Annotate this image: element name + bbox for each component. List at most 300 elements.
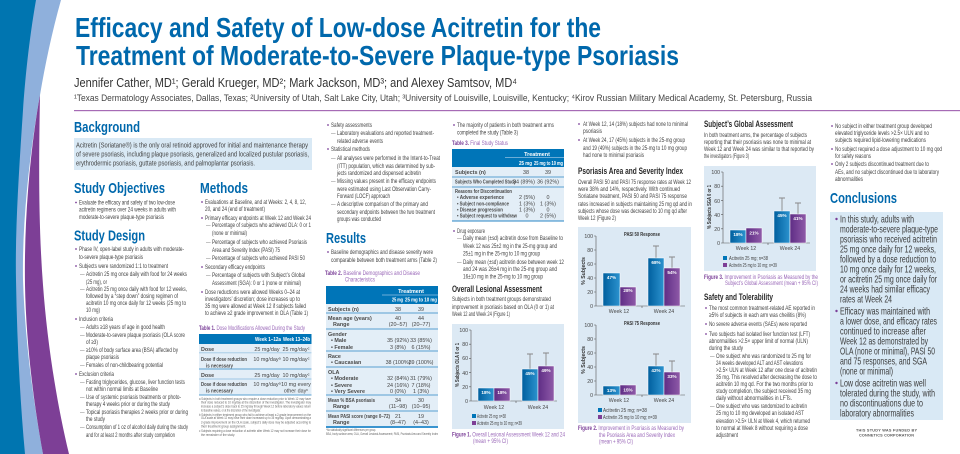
heading: conclusions: Conclusions bbox=[830, 190, 897, 207]
PASI 75 chart: PASI 75 Response bbox=[624, 321, 660, 327]
table 3: 25 mg to 10 mg bbox=[534, 161, 563, 167]
title: Efficacy and Safety of Low-dose Acitretin for the bbox=[75, 12, 601, 43]
figure 3 caption: Figure 3. Improvement in Psoriasis as Measured by the bbox=[704, 274, 818, 281]
text: safety and statistics: A descriptive comparison of the primary and bbox=[337, 201, 428, 208]
table 1 footnotes bbox=[199, 397, 312, 437]
text: study design: Inclusion criteria bbox=[79, 316, 113, 323]
figure 1 caption: (mean + 95% CI) bbox=[473, 438, 508, 445]
text: safety and tolerability: — bbox=[710, 354, 715, 359]
table 1: other dayᶜ bbox=[284, 388, 308, 394]
figure 3 caption: Subject’s Global Assessment (mean + 95% CI) bbox=[725, 280, 818, 287]
text: study completion bbox=[453, 122, 554, 136]
figure 1 chart: 60 bbox=[462, 356, 468, 362]
text: safety and statistics bbox=[327, 122, 440, 223]
text: study design: (25 mg), or bbox=[86, 279, 108, 286]
figure 3 chart: 0 bbox=[717, 241, 720, 247]
PASI 75 chart: 0 bbox=[590, 393, 593, 399]
figure 3 chart: % Subjects SGA 0 or 1 bbox=[707, 185, 713, 229]
text: study design: Exclusion criteria bbox=[79, 371, 114, 378]
table 2: Range bbox=[333, 404, 349, 410]
table 3: 36 (92%) bbox=[537, 180, 559, 186]
text: methods: Percentage of subjects who achieved PASI 50 bbox=[212, 255, 305, 262]
figure 3 chart: 40 bbox=[714, 213, 720, 219]
text: week results: psoriasis bbox=[583, 128, 603, 135]
text: study design: — bbox=[80, 333, 85, 338]
figure 1 chart: Acitretin 25 mg; n=38 bbox=[477, 414, 506, 420]
text: safety and statistics: groups was conducted bbox=[337, 216, 381, 223]
table 2: Treatment bbox=[398, 289, 424, 295]
table 1: is necessary bbox=[206, 388, 233, 394]
heading: results: Results bbox=[326, 230, 366, 247]
table 2: • Caucasian bbox=[331, 360, 361, 366]
text: drug exposure: and 24 was 26±4 mg in the 25-mg group and bbox=[463, 266, 557, 273]
text: study design: and for at least 2 months after study completion bbox=[86, 432, 175, 439]
text: safety and tolerability: during the study bbox=[709, 345, 744, 352]
text: safety and statistics: — bbox=[331, 131, 336, 136]
text: methods: Area and Severity Index (PASI) 75 bbox=[212, 247, 280, 254]
table 2: (4–43) bbox=[413, 420, 429, 426]
PASI 75 chart: 100 bbox=[584, 323, 593, 329]
text: methods: 20, and 24 (end of treatment) bbox=[205, 206, 265, 213]
text: week results bbox=[578, 121, 688, 159]
table 1: Week 13–24b bbox=[283, 337, 311, 343]
text: week results: had none to minimal psoriasis bbox=[583, 152, 644, 159]
text: safety and tolerability: elevation >2.5× ULN at Week 4, which returned bbox=[716, 418, 810, 425]
table 1: 10 mg/dayᶜ bbox=[282, 373, 310, 379]
title: Treatment of Moderate-to-Severe Plaque-type Psoriasis bbox=[76, 40, 679, 71]
table 2: 7 (18%) bbox=[412, 383, 431, 389]
text: PASI: rates increased in subjects maintaining 25 mg qd and in bbox=[578, 201, 692, 208]
table 2: 40 bbox=[395, 316, 401, 322]
text: drug exposure: Daily mean (±sd) acitretin dose between week 12 bbox=[463, 259, 564, 266]
table 3: 0 bbox=[546, 208, 550, 214]
figure 2 caption: Figure 2. Improvement in Psoriasis as Measured by bbox=[578, 425, 685, 432]
text: safety and tolerability: ≥5% of subjects in each arm was cheilitis (8%) bbox=[709, 312, 806, 319]
text: laboratory findings: abnormalities bbox=[835, 176, 863, 183]
table 2: OLA bbox=[328, 370, 339, 376]
text: subject's global assessment bbox=[704, 132, 814, 160]
figure 1 chart bbox=[452, 324, 564, 429]
text: methods: Assessment (SGA): 0 or 1 (none or minimal) bbox=[212, 280, 301, 287]
table 1 footnotes: to Baseline values, or at the discretion of the investigator. bbox=[201, 408, 261, 412]
table 3: • Subject non-compliance bbox=[457, 202, 509, 208]
text: study objectives: moderate-to-severe plaque-type psoriasis bbox=[79, 214, 164, 221]
figure 1 chart: Week 12 bbox=[484, 405, 504, 411]
table 1 footnotes: the remainder of the study. bbox=[201, 433, 235, 437]
PASI 50 chart: 20 bbox=[587, 290, 593, 296]
figure 3 chart: 21% bbox=[749, 230, 759, 236]
text: study design: therapy 4 weeks prior or during the study bbox=[86, 401, 170, 408]
text: overall lesional assessment: Week 12 and Week 24 (Figure 1) bbox=[452, 311, 510, 318]
text: study design: — bbox=[80, 395, 85, 400]
figure 3 chart: 41% bbox=[793, 216, 803, 221]
figure 3 chart: Acitretin 25 mg; n=38 bbox=[729, 256, 768, 262]
table 2: 38 (100%) bbox=[386, 360, 411, 366]
PASI 50 chart: % Subjects bbox=[581, 257, 587, 285]
PASI 75 chart: 42% bbox=[651, 368, 661, 373]
table 2 title: Table 2. Baseline Demographics and Disease bbox=[325, 270, 420, 277]
table 3: 1 (3%) bbox=[519, 208, 535, 214]
figure 1 chart: Acitretin 25 mg to 10 mg; n=39 bbox=[477, 421, 522, 427]
table 2: Mean age (years) bbox=[328, 316, 372, 322]
table 2 bbox=[325, 270, 438, 436]
table 1 title: Table 1. Dose Modifications Allowed During the Study bbox=[199, 325, 306, 332]
text: safety and tolerability: acitretin 10 mg qd. For the two months prior to bbox=[716, 381, 813, 388]
PASI 75 chart: 60 bbox=[587, 351, 593, 357]
table 3: 1 (3%) bbox=[519, 202, 535, 208]
table 1 footnotes: their dose reduced to 10 mg/day at the discretion of the investigator. The investigator may bbox=[201, 401, 311, 405]
table 1 footnotes: b Subjects in either treatment group who fail to achieve at least a 2-grade improvement on the bbox=[199, 413, 311, 417]
table 2: 38 bbox=[395, 307, 401, 313]
text: study design: Topical psoriasis therapies 2 weeks prior or during bbox=[86, 409, 188, 416]
table 3 bbox=[452, 140, 564, 221]
decorative swoosh bbox=[0, 0, 69, 454]
heading: PASI: Psoriasis Area and Severity Index bbox=[578, 166, 683, 177]
text: study design: — bbox=[80, 380, 85, 385]
table 2: 19 bbox=[418, 414, 424, 420]
funding note: THIS STUDY WAS FUNDED BY bbox=[856, 428, 917, 432]
table 3: 2 (5%) bbox=[519, 195, 535, 201]
table 2: *No statistically significant differences per group. bbox=[326, 428, 376, 432]
heading: methods: Methods bbox=[200, 180, 248, 197]
PASI 75 chart: Week 12 bbox=[609, 398, 629, 404]
heading: safety and tolerability: Safety and Tolerability bbox=[704, 292, 773, 303]
table 2: • Male bbox=[331, 338, 346, 344]
text: overall lesional assessment: Subjects in both treatment groups demonstrated bbox=[452, 296, 551, 303]
PASI 75 chart: 15% bbox=[623, 388, 633, 392]
table 2: 25 mg to 10 mg bbox=[405, 298, 437, 304]
text: study objectives: acitretin regimens over 24 weeks in adults with bbox=[79, 207, 176, 214]
text: safety and tolerability: 25 mg to 10 mg developed an isolated AST bbox=[716, 410, 804, 417]
PASI 75 chart: 33% bbox=[667, 374, 677, 379]
table 3: Reasons for Discontinuation bbox=[455, 189, 512, 195]
text: safety and tolerability: to normal at Week 8 without requiring a dose bbox=[716, 425, 808, 432]
table 2: Range bbox=[333, 420, 349, 426]
text: drug exposure: Daily mean (±sd) acitretin dose from Baseline to bbox=[463, 235, 563, 242]
heading: study design: Study Design bbox=[74, 228, 145, 244]
text: study completion: The majority of patients in both treatment arms bbox=[457, 122, 554, 129]
table 2: 25 mg bbox=[392, 298, 403, 304]
PASI 50 chart: 100 bbox=[584, 234, 593, 240]
text: safety and tolerability: — bbox=[710, 404, 715, 409]
table 3: 0 bbox=[526, 214, 528, 220]
figure 1 chart: Week 24 bbox=[528, 405, 548, 411]
table 2: 21 bbox=[395, 414, 401, 420]
text: PASI: Overall PASI 50 and PASI 75 response rates at Week 12 bbox=[578, 179, 691, 186]
funding note bbox=[856, 428, 917, 438]
text: study design: Subjects were randomized 1:1 to treatment bbox=[79, 263, 168, 270]
text: study design: ≥10% of body surface area (BSA) affected by bbox=[86, 347, 178, 354]
PASI 75 chart bbox=[581, 321, 685, 404]
text: safety and statistics: jects randomized and dispensed acitretin bbox=[336, 170, 421, 177]
text: safety and statistics: Safety assessments bbox=[331, 122, 372, 129]
PASI 75 chart: % Subjects bbox=[581, 346, 587, 374]
authors: Jennifer Cather, MD¹; Gerald Krueger, MD²; Mark Jackson, MD³; and Alexey Samtsov, MD⁴ bbox=[74, 75, 517, 90]
table 1: 10 mg/dayᵃ bbox=[253, 357, 282, 363]
table 2: BSA, body surface area; OLA, Overall Lesional Assessment; PASI, Psoriasis Area and Severity Index bbox=[326, 432, 438, 436]
text: methods: Percentage of subjects with Subject’s Global bbox=[212, 272, 305, 279]
text: methods: investigators’ discretion; dose increases up to bbox=[205, 296, 300, 303]
table 2: 3 (8%) bbox=[390, 345, 406, 351]
table 2: 44 bbox=[418, 316, 424, 322]
text: drug exposure: Drug exposure bbox=[457, 228, 485, 235]
heading: overall lesional assessment: Overall Lesional Assessment bbox=[452, 284, 543, 295]
table 2: Mean % BSA psoriasis bbox=[328, 398, 375, 404]
table 2: (20–77) bbox=[412, 322, 430, 328]
text: safety and statistics: related adverse events bbox=[337, 138, 383, 145]
text: safety and tolerability: adjustment bbox=[716, 432, 738, 439]
table 2: • Moderate bbox=[331, 376, 358, 382]
text: methods: Primary efficacy endpoints at Week 12 and Week 24 bbox=[205, 215, 311, 222]
PASI 75 chart: 40 bbox=[587, 365, 593, 371]
text: study design: followed by a “step down” dosing regimen of bbox=[86, 293, 178, 300]
table 2: 1 (3%) bbox=[413, 389, 429, 395]
table 3: • Subject request to withdraw bbox=[457, 214, 518, 220]
table 1 bbox=[199, 325, 312, 395]
text: study design: 10 mg) bbox=[86, 307, 100, 314]
table 2: • Female bbox=[331, 345, 353, 351]
text: subject's global assessment: reporting that their psoriasis was none to minimal at bbox=[704, 139, 811, 146]
table 1: Dose if dose reduction bbox=[201, 382, 247, 388]
text: laboratory findings: for safety reasons bbox=[835, 153, 871, 160]
title bbox=[75, 12, 679, 71]
table 1: 10 mg every bbox=[281, 382, 311, 388]
figure 2 chart: Acitretin 25 mg; n=38 bbox=[603, 408, 647, 414]
text: subject's global assessment: Week 12 and Week 24 was similar to that reported by bbox=[704, 146, 814, 153]
figure 1 chart: 40 bbox=[462, 371, 468, 377]
table 2: 30 bbox=[418, 398, 424, 404]
table 2: (10–95) bbox=[412, 404, 430, 410]
figure 2 caption: the Psoriasis Area and Severity Index bbox=[599, 432, 676, 439]
text: safety and tolerability: study completion, the subject received 35 mg bbox=[716, 388, 811, 395]
PASI 75 chart: 13% bbox=[607, 388, 616, 393]
text: safety and tolerability: One subject who was randomized to 25 mg for bbox=[716, 353, 812, 360]
text: overall lesional assessment: improvement in psoriasis based on OLA (0 or 1) at bbox=[452, 304, 554, 311]
panel: background bbox=[74, 138, 312, 170]
text: methods bbox=[201, 199, 311, 317]
text: methods: (none or minimal) bbox=[212, 230, 247, 237]
text: drug exposure: Week 12 was 25±2 mg in the 25-mg group and bbox=[463, 243, 557, 250]
text: study design: — bbox=[80, 325, 85, 330]
text: study design: Moderate-to-severe plaque psoriasis (OLA score bbox=[86, 332, 185, 339]
table 3: Treatment bbox=[524, 152, 550, 158]
text: study design: plaque psoriasis bbox=[86, 354, 119, 361]
PASI 50 chart: Week 24 bbox=[654, 309, 674, 315]
text: safety and tolerability: The most common treatment-related AE reported in bbox=[709, 305, 815, 312]
text: PASI bbox=[577, 179, 692, 222]
heading: subject's global assessment: Subject’s Global Assessment bbox=[704, 119, 794, 130]
table 1: 25 mg/day bbox=[254, 373, 280, 379]
figure 3 chart: Week 24 bbox=[780, 246, 800, 252]
text: safety and statistics: Missing values present in the efficacy endpoints bbox=[337, 178, 436, 185]
text: methods: — bbox=[206, 256, 211, 261]
text: safety and tolerability: daily without abnormalities in LFTs. bbox=[716, 395, 792, 402]
table 2: 39 (100%) bbox=[409, 360, 434, 366]
figure 3 chart: 20 bbox=[714, 227, 720, 233]
figure 1 chart: 18% bbox=[481, 390, 491, 395]
table 1 footnotes: OLA scale at Week 12 may have their dose increased up to 35 mg/day. Upon demonstrating a bbox=[201, 416, 311, 420]
table 2: Mean PASI score (range 0–72) bbox=[328, 414, 390, 420]
text: study design: not within normal limits at Baseline bbox=[86, 386, 158, 393]
PASI 50 chart: Week 12 bbox=[609, 309, 629, 315]
figure 2 caption: (mean + 95% CI) bbox=[599, 438, 633, 446]
PASI 50 chart: 54% bbox=[667, 270, 677, 275]
PASI 50 chart bbox=[581, 232, 685, 315]
table 2: Subjects (n) bbox=[328, 307, 359, 313]
PASI 50 chart: 47% bbox=[607, 275, 616, 280]
text: safety and tolerability: 35 mg. This resolved after decreasing the dose to bbox=[716, 374, 817, 381]
text: methods: Dose reductions were allowed Weeks 0–24 at bbox=[205, 289, 300, 296]
figure 3 chart: Week 12 bbox=[736, 246, 756, 252]
text: methods: Secondary efficacy endpoints bbox=[205, 264, 265, 271]
table 1: Dose if dose reduction bbox=[201, 357, 247, 363]
text: safety and statistics: were estimated using Last Observation Carry- bbox=[336, 186, 431, 193]
text: methods: Percentage of subjects who achieved OLA: 0 or 1 bbox=[212, 222, 311, 229]
table 1 footnotes: their treatment group assignment. bbox=[201, 425, 246, 429]
text: PASI: Week 12 (Figure 2) bbox=[578, 215, 616, 222]
text: safety and tolerability: Two subjects had isolated liver function test (LFT) bbox=[709, 331, 810, 338]
text: safety and statistics: Laboratory evaluations and reported treatment- bbox=[337, 130, 434, 137]
text: study design: Adults ≥18 years of age in good health bbox=[86, 324, 165, 331]
text: study objectives: Evaluate the efficacy and safety of two low-dose bbox=[79, 199, 175, 206]
table 2: 31 (79%) bbox=[410, 376, 432, 382]
text: methods: 35 mg were allowed at Week 12 if subjects failed bbox=[205, 303, 306, 310]
table 2: 35 (92%) bbox=[387, 338, 409, 344]
heading: background: Background bbox=[74, 119, 140, 136]
table 1 footnotes: a Subjects in both treatment groups who require a dose reduction prior to Week 12 may have bbox=[199, 397, 311, 401]
text: methods: Evaluations at Baseline, and at Weeks: 2, 4, 8, 12, bbox=[205, 199, 306, 206]
table 2: 0 (0%) bbox=[390, 389, 406, 395]
text: safety and statistics: Statistical methods bbox=[331, 146, 370, 153]
text: safety and tolerability bbox=[705, 305, 817, 439]
text: drug exposure: 25±1 mg in the 25-mg to 10 mg group bbox=[463, 250, 540, 258]
figure 3 chart: Acitretin 25 mg to 10 mg; n=39 bbox=[729, 263, 777, 269]
table 2: Race bbox=[328, 354, 341, 360]
text: study design: of ≥3) bbox=[86, 339, 98, 346]
text: methods: — bbox=[206, 223, 211, 228]
table 2: (11–98) bbox=[389, 404, 407, 410]
text: study design bbox=[75, 246, 188, 439]
figure 3 caption bbox=[704, 274, 818, 287]
panel: background: erythrodermic psoriasis, guttate psoriasis, and palmoplantar psoriasis. bbox=[76, 158, 255, 168]
panel: conclusions: In this study, adults with bbox=[840, 214, 914, 226]
heading: study objectives: Study Objectives bbox=[74, 180, 165, 197]
PASI 50 chart: PASI 50 Response bbox=[624, 232, 660, 238]
text: drug exposure: — bbox=[457, 236, 462, 241]
figure 3 chart: 18% bbox=[733, 232, 743, 237]
panel: conclusions bbox=[830, 212, 943, 420]
table 3: 39 bbox=[545, 170, 551, 176]
table 1: is necessary bbox=[206, 364, 233, 370]
text: study design: Consumption of 1 oz of alcohol daily during the study bbox=[86, 424, 188, 431]
table 2: 24 (16%) bbox=[387, 383, 409, 389]
text: week results: and 19 (49%) subjects in the 25-mg to 10 mg group bbox=[583, 145, 687, 152]
text: safety and tolerability: 24 weeks developed ALT and AST elevations bbox=[716, 360, 803, 367]
table 2: 6 (15%) bbox=[412, 345, 431, 351]
table 2: 39 bbox=[418, 307, 424, 313]
text: drug exposure bbox=[453, 228, 564, 280]
text: PASI: Soriatane treatment, PASI 50 and PASI 75 response bbox=[578, 193, 687, 200]
text: study objectives bbox=[75, 199, 176, 221]
text: subject's global assessment: In both treatment arms, the percentage of subjects bbox=[704, 132, 807, 139]
text: safety and tolerability: One subject who was randomized to acitretin bbox=[716, 403, 807, 410]
text: study design: — bbox=[80, 348, 85, 353]
PASI 75 chart: Week 24 bbox=[654, 398, 674, 404]
affiliations: ¹Texas Dermatology Associates, Dallas, Texas; ²University of Utah, Salt Lake City, Utah; ³University of Louisville, Louisville, Kentucky; ⁴Kirov Russian Military Medical Academy, St. Petersburg, Russia bbox=[74, 93, 813, 104]
figure 3 chart: 45% bbox=[777, 213, 787, 218]
figure 1 caption bbox=[452, 432, 565, 445]
text: methods: Percentage of subjects who achieved Psoriasis bbox=[212, 239, 307, 246]
text: study design: Use of systemic psoriasis treatments or photo- bbox=[86, 394, 181, 401]
text: methods: — bbox=[206, 273, 211, 278]
table 2: Gender bbox=[328, 332, 348, 338]
table 2 title: Characteristics bbox=[345, 276, 375, 284]
text: safety and statistics: secondary endpoints between the two treatment bbox=[337, 209, 435, 216]
figure 2 caption bbox=[578, 425, 685, 446]
PASI 50 chart: 80 bbox=[587, 248, 593, 254]
table 1 footnotes: c Subjects requiring a dose reduction of acitretin after Week 12 may not increase their dose for bbox=[199, 429, 312, 433]
figure 2 chart: Acitretin 25 mg to 10 mg; n=39 bbox=[603, 415, 657, 421]
text: week results: At Week 12, 14 (18%) subjects had none to minimal bbox=[583, 121, 688, 128]
text: study design: to-severe plaque-type psoriasis bbox=[79, 254, 143, 261]
text: overall lesional assessment bbox=[452, 296, 554, 318]
table 1: 10 mg/dayᵃ bbox=[253, 382, 282, 388]
text: results: comparable between both treatment arms (Table 2) bbox=[331, 257, 437, 264]
figure 3 chart: 80 bbox=[714, 184, 720, 190]
figure 1 chart: 0 bbox=[465, 399, 468, 405]
table 3: Subjects Who Completed Study bbox=[455, 180, 516, 186]
panel: conclusions: no discontinuations due to bbox=[840, 398, 923, 410]
table 1: Week 1–12a bbox=[255, 337, 282, 343]
text: safety and statistics: Forward (LOCF) approach bbox=[337, 193, 390, 200]
text: safety and statistics: — bbox=[331, 179, 336, 184]
text: drug exposure: 16±10 mg in the 25-mg to 10 mg group bbox=[463, 274, 543, 280]
table 2: Range bbox=[333, 322, 349, 328]
text: safety and tolerability: No severe adverse events (SAEs) were reported bbox=[709, 321, 807, 328]
table 3: 1 (3%) bbox=[540, 202, 556, 208]
text: safety and statistics: (ITT) population, which was determined by sub- bbox=[337, 163, 435, 170]
text: safety and tolerability: abnormalities >2.5× upper limit of normal (ULN) bbox=[709, 338, 808, 345]
PASI 75 chart: 20 bbox=[587, 379, 593, 385]
text: subject's global assessment: the investigators (Figure 3) bbox=[704, 153, 749, 160]
text: study design: — bbox=[80, 287, 85, 292]
text: PASI: subjects whose dose was decreased to 10 mg qd after bbox=[578, 208, 688, 215]
PASI 50 chart: 60 bbox=[587, 262, 593, 268]
table 2: 34 bbox=[395, 398, 401, 404]
text: study design: Females of non-childbearing potential bbox=[86, 362, 163, 369]
figure 1 chart: 45% bbox=[525, 371, 535, 376]
panel: conclusions: rates at Week 24 bbox=[840, 294, 892, 306]
table 1: 25 mg/day bbox=[254, 347, 280, 353]
figure 3 chart bbox=[704, 166, 816, 271]
text: safety and statistics: All analyses were performed in the Intent-to-Treat bbox=[337, 155, 440, 162]
table 1: Dose bbox=[201, 373, 214, 379]
figure 3 chart: 60 bbox=[714, 199, 720, 205]
table 2: (8–47) bbox=[390, 420, 406, 426]
figure 1 chart: 100 bbox=[459, 328, 468, 334]
panel: conclusions: laboratory abnormalities bbox=[840, 408, 914, 420]
table 3: 34 (89%) bbox=[513, 180, 535, 186]
table 2: 33 (85%) bbox=[410, 338, 432, 344]
panel: conclusions: (none or minimal) bbox=[840, 366, 893, 378]
text: results bbox=[327, 249, 437, 264]
table 3: 0 bbox=[546, 195, 550, 201]
table 1: 10 mg/dayᶜ bbox=[282, 357, 310, 363]
text: study design: — bbox=[80, 425, 85, 430]
table 3: 38 bbox=[523, 170, 529, 176]
figure 1 chart: % Subjects OLA 0 or 1 bbox=[455, 343, 461, 387]
panel: background: of severe psoriasis, including plaque psoriasis, generalized and localized pustular psoriasis, bbox=[76, 150, 309, 158]
